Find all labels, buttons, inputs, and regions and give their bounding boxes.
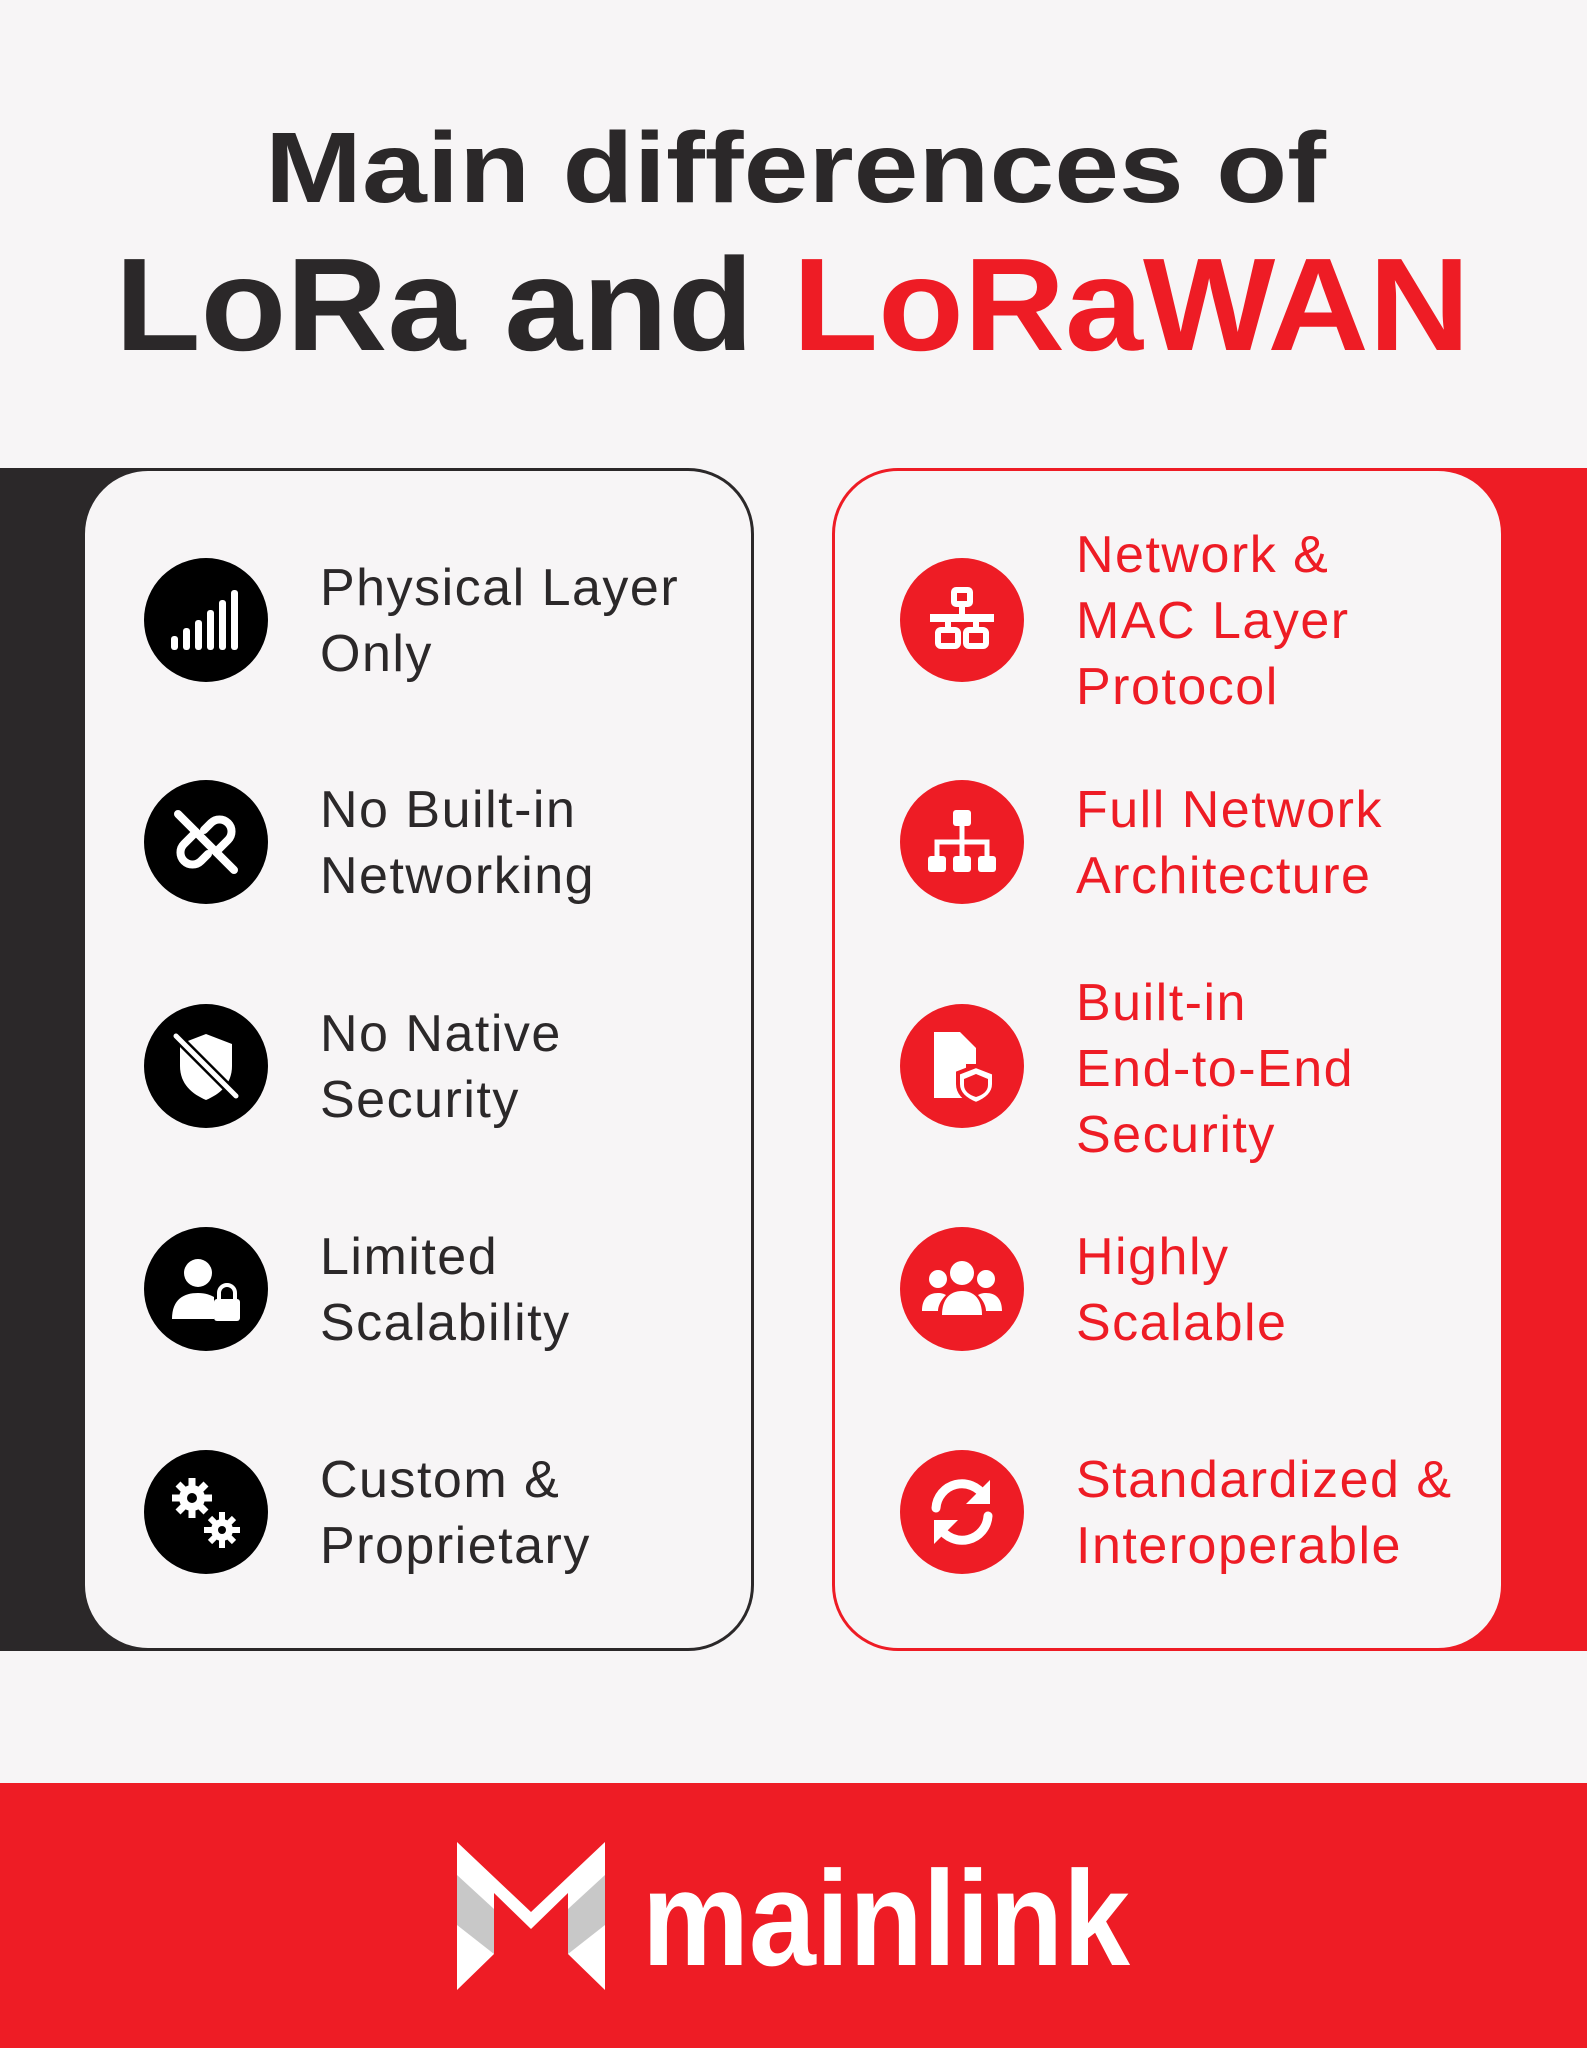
text: standardized: Standardized & (1076, 1451, 1453, 1509)
text: network & mac: MAC Layer (1076, 592, 1350, 650)
text: network & mac (1076, 526, 1350, 716)
title: LoRa and LoRaWAN (115, 231, 1470, 378)
icon: M logo (457, 1842, 605, 1990)
text: limited scalability: Limited (320, 1228, 498, 1286)
icon: gears (144, 1450, 268, 1574)
text: standardized: Interoperable (1076, 1517, 1402, 1575)
text: limited scalability (320, 1228, 571, 1352)
text: scalable: Highly (1076, 1228, 1230, 1286)
text: full network (1076, 781, 1383, 905)
dark band (0, 468, 420, 1651)
panel: LoRaWAN (832, 468, 1504, 1651)
text: scalable: Scalable (1076, 1294, 1287, 1352)
icon: broken link (144, 780, 268, 904)
text: no networking: No Built-in (320, 781, 576, 839)
text: full network: Architecture (1076, 847, 1371, 905)
text: network & mac: Network & (1076, 526, 1329, 584)
text: custom: Custom & (320, 1451, 560, 1509)
text: full network: Full Network (1076, 781, 1383, 839)
text: security: Built-in (1076, 974, 1247, 1032)
red band (1170, 468, 1587, 1651)
text: no networking: Networking (320, 847, 595, 905)
text: no networking (320, 781, 595, 905)
text: no security: Security (320, 1071, 520, 1129)
title (115, 112, 1470, 378)
icon: network (900, 558, 1024, 682)
text: custom: Proprietary (320, 1517, 591, 1575)
text: network & mac: Protocol (1076, 658, 1279, 716)
text: physical layer (320, 559, 679, 683)
text: custom (320, 1451, 591, 1575)
icon: user lock (144, 1227, 268, 1351)
text: no security: No Native (320, 1005, 562, 1063)
icon: signal (144, 558, 268, 682)
icon: shield off (144, 1004, 268, 1128)
wordmark: mainlink (642, 1843, 1131, 1994)
text: security: Security (1076, 1106, 1276, 1164)
text: physical layer: Physical Layer (320, 559, 679, 617)
text: security: End-to-End (1076, 1040, 1354, 1098)
icon: hierarchy (900, 780, 1024, 904)
text: no security (320, 1005, 562, 1129)
icon: sync (900, 1450, 1024, 1574)
icon: group (900, 1227, 1024, 1351)
title: Main differences of (265, 112, 1327, 224)
text: standardized (1076, 1451, 1453, 1575)
text: physical layer: Only (320, 625, 433, 683)
footer (0, 1783, 1587, 2048)
icon: file shield (900, 1004, 1024, 1128)
logo (457, 1842, 1131, 1994)
text: limited scalability: Scalability (320, 1294, 571, 1352)
text: scalable (1076, 1228, 1287, 1352)
text: security (1076, 974, 1354, 1164)
panel: LoRa (82, 468, 754, 1651)
